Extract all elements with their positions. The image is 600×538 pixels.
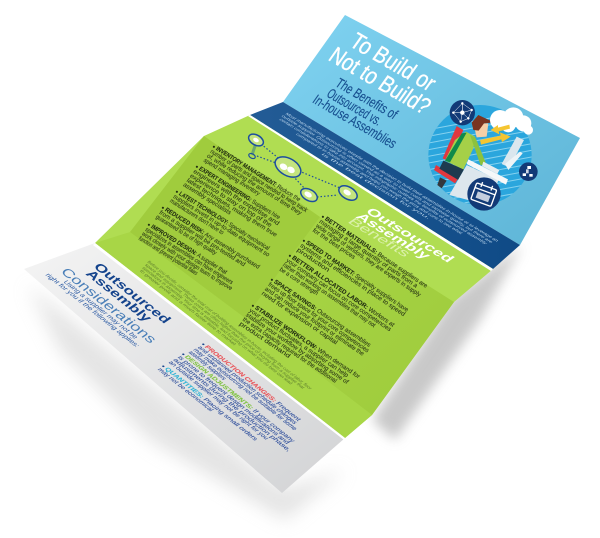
text block: better allocated labor: BETTER ALLOCATED LABOR: Workers at bbox=[290, 255, 396, 329]
illustration: engineer at desk bbox=[427, 100, 538, 211]
text block: better materials: wide range of vendors, they are experts in supply bbox=[313, 222, 423, 299]
shadow under brochure bbox=[28, 245, 522, 520]
list: quantities bbox=[155, 364, 258, 444]
person bbox=[439, 115, 494, 180]
text block: reduced risk: guaranteed to be of high quality bbox=[154, 214, 219, 257]
closing note: space and equipment. These costs are often higher than the price of buying from a supplier that bbox=[144, 263, 306, 390]
fold highlight bbox=[248, 115, 493, 271]
icon: network bbox=[450, 100, 475, 125]
text block: space savings: frees up floor space for your core competencies bbox=[267, 281, 370, 354]
text block: stabilize workflow: stabilize your workflow by absorbing some of bbox=[244, 312, 350, 386]
text block: stabilize workflow: your product fluctuates, a supplier can help bbox=[248, 307, 350, 379]
subtitle: Outsourced vs. bbox=[324, 86, 385, 129]
list: production changes: assembly suppliers bbox=[187, 350, 227, 381]
text block: expert engineering: EXPERT ENGINEERING: Suppliers hire bbox=[197, 166, 282, 221]
panel: intro band bbox=[250, 102, 520, 269]
list: design adjustments bbox=[166, 352, 301, 455]
heading: outsourced assembly benefits: Benefits bbox=[345, 215, 415, 259]
monitor bbox=[502, 137, 524, 170]
text block: expert engineering: experience to stay on top of the bbox=[188, 173, 274, 229]
text block: inventory management: number of parts and space needed to keep track bbox=[209, 148, 309, 214]
list: quantities: may not be economical bbox=[156, 368, 214, 413]
text block: speed to market: SPEED TO MARKET: Specialty suppliers have bbox=[304, 240, 410, 314]
text block: space savings: and can reduce your footprint or eliminate the bbox=[263, 286, 366, 358]
text block: reduced risk: REDUCED RISK: Any assembly purchased bbox=[163, 207, 261, 271]
subtitle bbox=[309, 72, 414, 152]
text block: inventory management: spend managing inventory bbox=[202, 157, 262, 198]
subtitle: The Benefits of bbox=[332, 76, 401, 123]
icon: flowchart bbox=[519, 162, 538, 181]
closing note: to greater profit and a much faster time to market bbox=[138, 269, 238, 347]
title: Not to Build? bbox=[324, 43, 435, 120]
intro text: Most manufacturing executives wrestle with the decision to build their assemblies in-house or to leverage an bbox=[284, 112, 501, 243]
heading: outsourced assembly considerations: Considerations bbox=[58, 265, 161, 346]
text block: stabilize workflow: product demand bbox=[238, 321, 292, 360]
heading: outsourced assembly benefits: Outsourced bbox=[363, 205, 458, 265]
icon: calendar bbox=[467, 177, 501, 211]
list: design adjustments: an outside supplier may not be right for you bbox=[167, 360, 269, 441]
list: design adjustments: is prone to frequent design modifications and bbox=[176, 356, 290, 445]
text block: improved design: specializes in assemblies can have engineers bbox=[144, 226, 234, 286]
title bbox=[324, 24, 449, 120]
list: production changes: PRODUCTION CHANGES: Frequent bbox=[203, 345, 302, 422]
chair bbox=[434, 126, 463, 188]
text block: expert engineering: assembly specialists bbox=[182, 182, 233, 216]
text block: speed to market: production bbox=[295, 247, 332, 274]
text block: stabilize workflow: the extra capacity required for the additional bbox=[241, 316, 338, 385]
intro text bbox=[269, 112, 501, 252]
list: design adjustments: adjustments during the production phase, bbox=[171, 358, 292, 453]
text block: improved design: function and prevent potential flaws bbox=[137, 235, 199, 277]
subtitle: In-house Assemblies bbox=[309, 93, 399, 152]
text block: better materials: managing a large quantity of parts from a bbox=[318, 218, 419, 290]
text block: expert engineering: latest techniques, making them true bbox=[185, 177, 279, 239]
list: production changes: and unplanned production schedule changes bbox=[196, 346, 298, 425]
intro sentence: Using a supplier may not be bbox=[61, 280, 139, 340]
text block: latest technology: LATEST TECHNOLOGY: Specialty mechanical bbox=[177, 191, 271, 252]
text block: improved design: work closely with your design team to improve bbox=[139, 230, 234, 292]
intro text: compared to in-house assembly and helps you weigh the pros and cons to see what bbox=[295, 132, 465, 235]
text block: speed to market: systems and efficiencies in place to speed bbox=[299, 242, 407, 318]
panel: outsourced assembly benefits bbox=[95, 115, 493, 438]
text block: space savings: need for expansion or capital bbox=[260, 290, 339, 346]
text block: inventory management: INVENTORY MANAGEMENT: Reduce the bbox=[214, 146, 302, 203]
text block: inventory management: of, while reducing the amount of time they bbox=[205, 153, 304, 217]
text block: better allocated labor: your company can focus on core competencies bbox=[285, 257, 392, 333]
heading: outsourced assembly considerations: Assembly bbox=[83, 267, 156, 325]
list: quantities: QUANTITIES: Placing small orders bbox=[163, 367, 258, 442]
desk bbox=[449, 159, 508, 205]
list: design adjustments: DESIGN ADJUSTMENTS: If your company bbox=[183, 355, 296, 443]
text block: better allocated labor: rather than working on assemblies that may not bbox=[281, 262, 377, 329]
closing note: specializes in assembly. Your time is valuable, and focusing on what you do best can lead bbox=[141, 266, 294, 385]
text block: latest technology: manufacturers don't have to bbox=[168, 198, 225, 236]
text block: better allocated labor: be a core strength bbox=[278, 266, 320, 297]
illustration backdrop bbox=[427, 105, 533, 210]
network diagram bbox=[247, 132, 360, 204]
title: To Build or bbox=[345, 29, 441, 97]
cloud bbox=[490, 107, 533, 135]
heading: outsourced assembly considerations: Outsourced bbox=[91, 260, 175, 326]
list: production changes: may make outsourcing not be suitable for some bbox=[191, 348, 298, 432]
intro sentence: right for you if the following applies: bbox=[43, 273, 141, 349]
text block: space savings: SPACE SAVINGS: Outsourcing assemblies bbox=[272, 279, 372, 349]
intro text: is the best decision for you. bbox=[320, 152, 432, 220]
text block: improved design: IMPROVED DESIGN: A supplier that bbox=[149, 224, 229, 276]
text block: stabilize workflow: STABILIZE WORKFLOW: When demand for bbox=[253, 305, 361, 380]
panel: outsourced assembly considerations bbox=[24, 243, 345, 493]
intro text: certain considerations to take into account. This infographic outlines the benefits of outsourced assembly bbox=[278, 118, 490, 245]
text block: reduced risk: from a supplier will be pre-tested and bbox=[158, 209, 247, 268]
text block: better materials: BETTER MATERIALS: Because suppliers are bbox=[323, 216, 429, 290]
text block: stabilize workflow bbox=[237, 302, 361, 398]
text block: expert engineering bbox=[181, 163, 289, 243]
text block: better materials: for the best prices bbox=[311, 227, 357, 261]
closing note: Before you decide, consider the total cost of building assemblies in-house, including the cost of labor, floor bbox=[146, 260, 314, 391]
panel: title cover bbox=[283, 15, 580, 245]
heading: outsourced assembly considerations bbox=[58, 260, 175, 346]
heading: outsourced assembly benefits: Assembly bbox=[353, 210, 435, 262]
heading: outsourced assembly benefits bbox=[345, 205, 458, 265]
text block: latest technology: suppliers invest in up-to-date equipment so bbox=[172, 193, 271, 259]
intro text: outside supplier. Outsourcing is often viewed as a way to lower costs and increase quality, but there are bbox=[280, 114, 495, 244]
text block: expert engineering: engineers with the expertise and bbox=[192, 168, 281, 227]
arrows bbox=[480, 125, 511, 145]
